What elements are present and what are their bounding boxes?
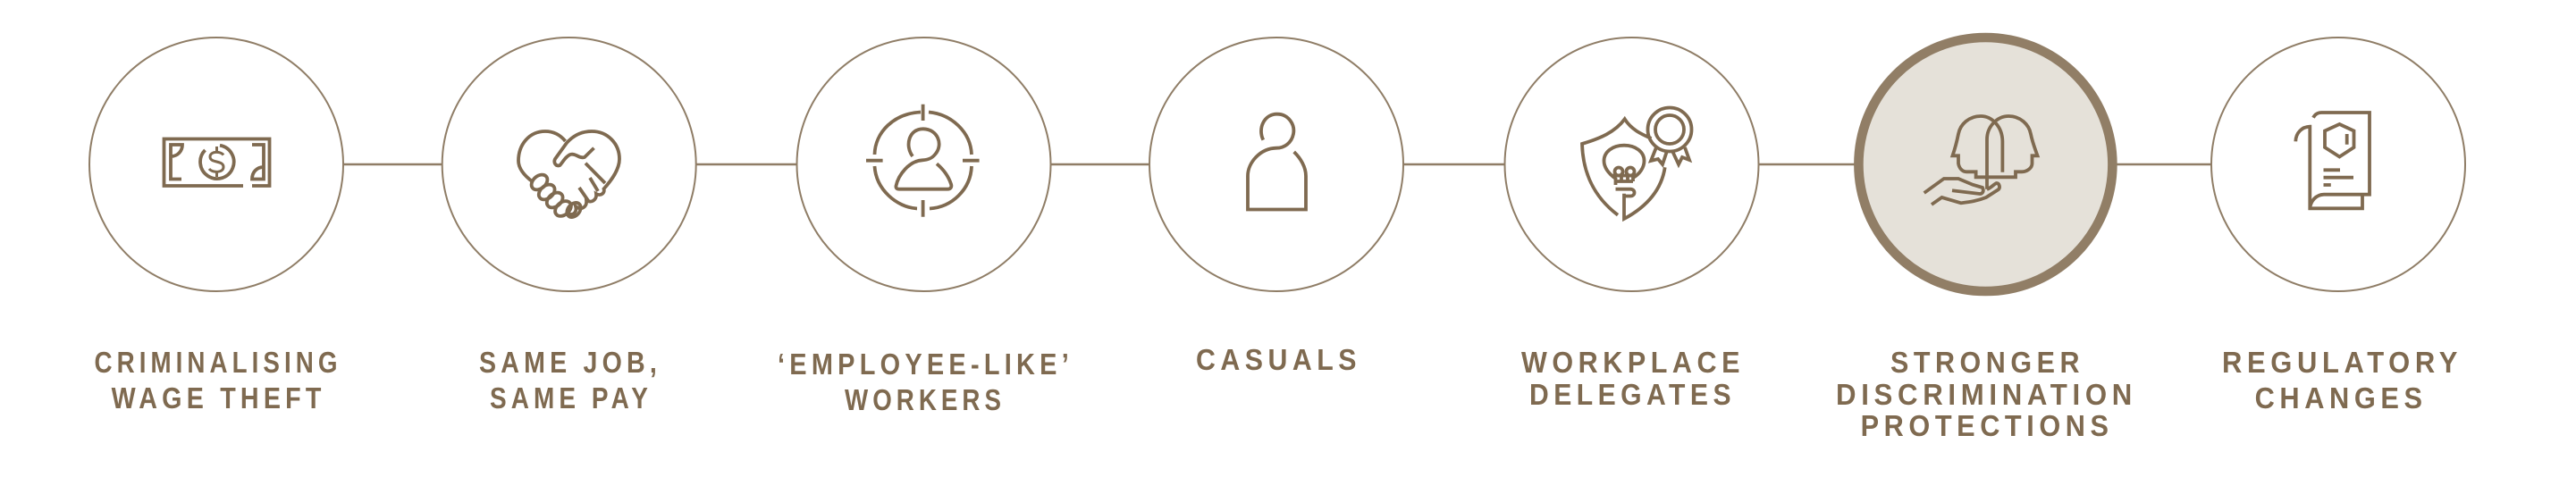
- label: casuals: CASUALS: [1196, 343, 1361, 376]
- label: 'employee-like' workers: WORKERS: [845, 383, 1006, 416]
- circle: step 7: [2211, 38, 2465, 291]
- label: regulatory changes: CHANGES: [2255, 381, 2428, 414]
- label: criminalising wage theft: [95, 346, 341, 414]
- step 1: criminalising wage theft: [89, 38, 343, 414]
- label: workplace delegates: WORKPLACE: [1521, 346, 1745, 379]
- label: criminalising wage theft: CRIMINALISING: [95, 346, 341, 379]
- icon: two heads over open hand: [1924, 116, 2038, 205]
- label: same job, same pay: [479, 346, 661, 414]
- circle: step 3: [797, 38, 1051, 291]
- label: same job, same pay: SAME JOB,: [479, 346, 661, 379]
- circle: step 4: [1149, 38, 1403, 291]
- label: criminalising wage theft: WAGE THEFT: [112, 381, 326, 414]
- icon: banknote: [164, 139, 270, 186]
- icon: handshake heart: [518, 131, 619, 220]
- circle: step 2: [442, 38, 696, 291]
- step 7: regulatory changes: [2211, 38, 2465, 414]
- step 4: casuals: [1149, 38, 1403, 376]
- label: same job, same pay: SAME PAY: [490, 381, 652, 414]
- icon: person: [1248, 114, 1306, 209]
- icon: book with shield: [2295, 113, 2370, 208]
- circle: step 5: [1505, 38, 1759, 291]
- label: regulatory changes: REGULATORY: [2222, 346, 2462, 379]
- step 6: stronger discrimination protections (highlighted): [1836, 38, 2137, 442]
- label: workplace delegates: DELEGATES: [1529, 378, 1736, 411]
- step 5: workplace delegates: [1505, 38, 1759, 411]
- label: stronger discrimination protections: [1836, 346, 2137, 442]
- label: 'employee-like' workers: ‘EMPLOYEE-LIKE’: [778, 347, 1073, 381]
- icon: person in target: [866, 105, 980, 217]
- icon: shield, bulb and medal: [1582, 107, 1691, 219]
- label: stronger discrimination protections: PROTECTIONS: [1861, 409, 2114, 442]
- circle: step 6 highlighted: [1858, 38, 2112, 291]
- label: regulatory changes: [2222, 346, 2462, 414]
- circle: step 1: [89, 38, 343, 291]
- label: workplace delegates: [1521, 346, 1745, 411]
- label: stronger discrimination protections: STRONGER: [1890, 346, 2084, 379]
- label: stronger discrimination protections: DISCRIMINATION: [1836, 378, 2137, 411]
- label: 'employee-like' workers: [778, 347, 1073, 416]
- step 2: same job, same pay: [442, 38, 696, 414]
- step 3: employee-like workers: [778, 38, 1073, 416]
